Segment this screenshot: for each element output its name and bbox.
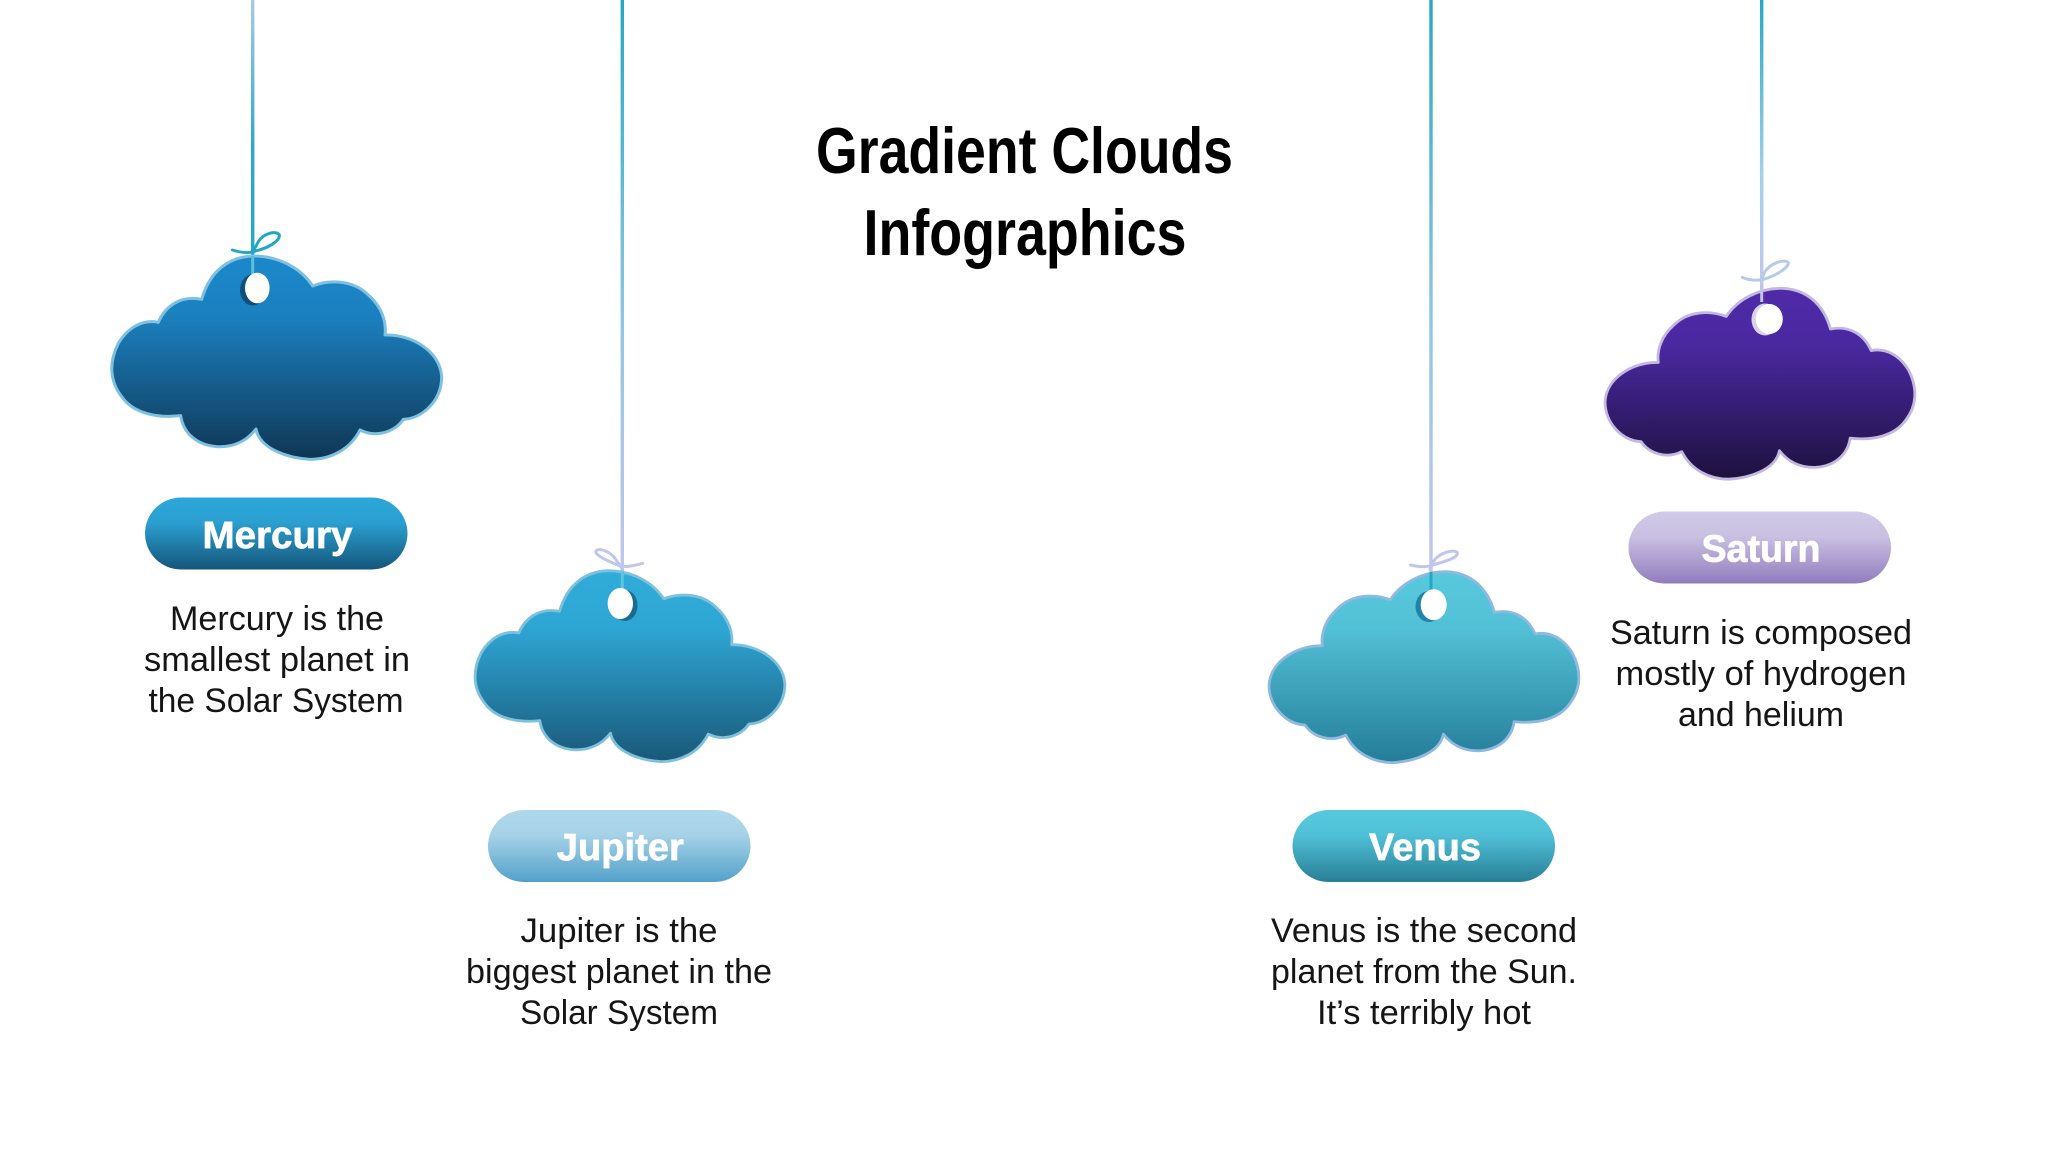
description: Mercury: the Solar System — [148, 682, 404, 720]
string: Mercury — [251, 0, 254, 262]
string over cloud: Mercury — [251, 256, 254, 276]
label: Venus: Venus — [1369, 827, 1481, 869]
cloud: Mercury — [112, 256, 442, 459]
panel: Saturn — [1605, 0, 1915, 734]
title — [816, 114, 1233, 269]
hole: Jupiter — [608, 588, 638, 621]
description: Venus — [1271, 912, 1577, 1032]
bow: Mercury — [232, 233, 279, 253]
label: Jupiter: Jupiter — [557, 827, 684, 869]
string: Jupiter — [621, 0, 624, 572]
description: Venus: It’s terribly hot — [1317, 994, 1532, 1032]
panel: Venus — [1269, 0, 1579, 1032]
cloud: Venus — [1269, 572, 1579, 763]
description: Jupiter: Solar System — [520, 994, 718, 1032]
string: Saturn — [1760, 0, 1763, 298]
cloud: Jupiter — [475, 571, 785, 762]
description: Saturn: mostly of hydrogen — [1616, 655, 1906, 693]
hole: Venus — [1416, 589, 1447, 622]
pill: Jupiter — [488, 810, 750, 882]
panel: Mercury — [112, 0, 442, 720]
string over cloud: Venus — [1430, 572, 1432, 590]
description: Saturn: and helium — [1678, 696, 1844, 734]
description: Saturn: Saturn is composed — [1610, 614, 1912, 652]
description: Jupiter: biggest planet in the — [466, 953, 772, 991]
string over cloud: Saturn — [1760, 284, 1763, 302]
pill: Saturn — [1628, 512, 1891, 584]
string: Venus — [1429, 0, 1433, 572]
cloud: Saturn — [1605, 288, 1915, 479]
hole: Mercury — [240, 273, 270, 306]
title: Gradient Clouds — [816, 114, 1233, 187]
bow: Saturn — [1742, 261, 1788, 281]
description: Saturn — [1610, 614, 1912, 734]
label: Saturn: Saturn — [1702, 528, 1820, 570]
description: Venus: Venus is the second — [1271, 912, 1577, 950]
description: Jupiter: Jupiter is the — [520, 912, 718, 950]
panel: Jupiter — [466, 0, 785, 1032]
description: Mercury: smallest planet in — [144, 641, 410, 679]
bow: Jupiter — [596, 550, 643, 569]
description: Mercury — [144, 600, 410, 720]
title: Infographics — [864, 196, 1186, 269]
description: Venus: planet from the Sun. — [1271, 953, 1577, 991]
pill: Mercury — [145, 498, 408, 570]
hole: Saturn — [1752, 304, 1783, 336]
pill: Venus — [1292, 810, 1555, 882]
description: Mercury: Mercury is the — [170, 600, 384, 638]
label: Mercury: Mercury — [202, 515, 352, 557]
bow: Venus — [1411, 551, 1457, 569]
string over cloud: Jupiter — [621, 570, 624, 590]
description: Jupiter — [466, 912, 772, 1032]
